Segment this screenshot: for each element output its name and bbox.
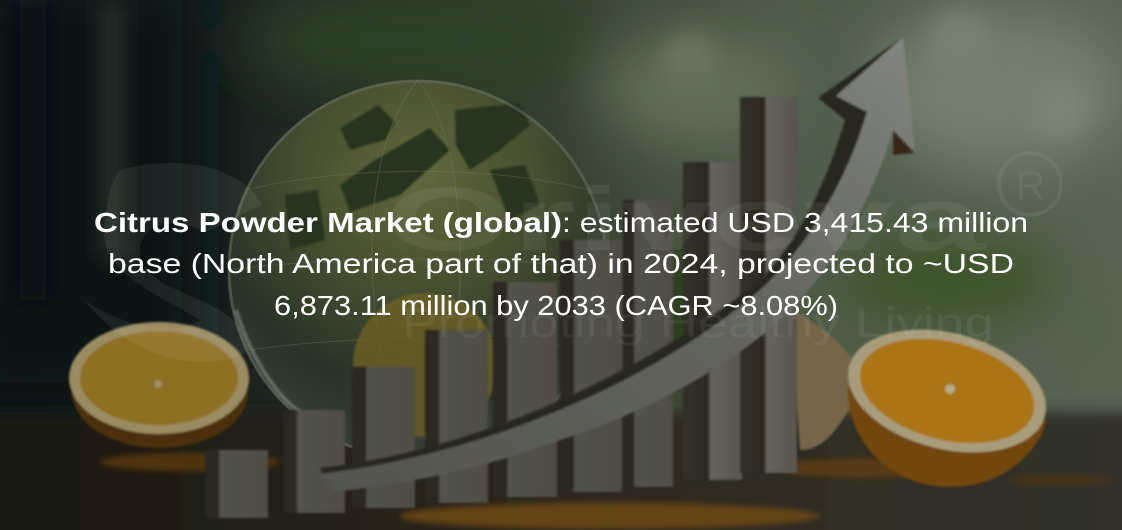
headline text: base (North America part of that) in 2024, projected to ~USD	[108, 248, 1014, 279]
spilled powder	[100, 453, 1110, 529]
watermark logo	[85, 153, 1061, 362]
headline text	[94, 207, 1028, 321]
watermark logo: Promoting Healthy Living	[402, 299, 994, 346]
headline text: Citrus Powder Market (global)	[94, 207, 562, 238]
rising bar chart	[205, 97, 797, 518]
right orange	[835, 310, 1059, 487]
watermark logo: Oriveva	[385, 170, 987, 270]
left orange	[69, 322, 249, 448]
arrow shadow side	[320, 37, 905, 480]
headline text: : estimated USD 3,415.43 million	[562, 207, 1028, 238]
globe	[228, 80, 608, 460]
watermark logo: R	[1016, 164, 1045, 208]
rising arrow	[320, 37, 915, 492]
arrow lit face	[320, 37, 915, 492]
headline text: 6,873.11 million by 2033 (CAGR ~8.08%)	[274, 290, 838, 321]
globe continents	[285, 103, 540, 250]
orange behind globe and behind bars	[353, 293, 862, 450]
